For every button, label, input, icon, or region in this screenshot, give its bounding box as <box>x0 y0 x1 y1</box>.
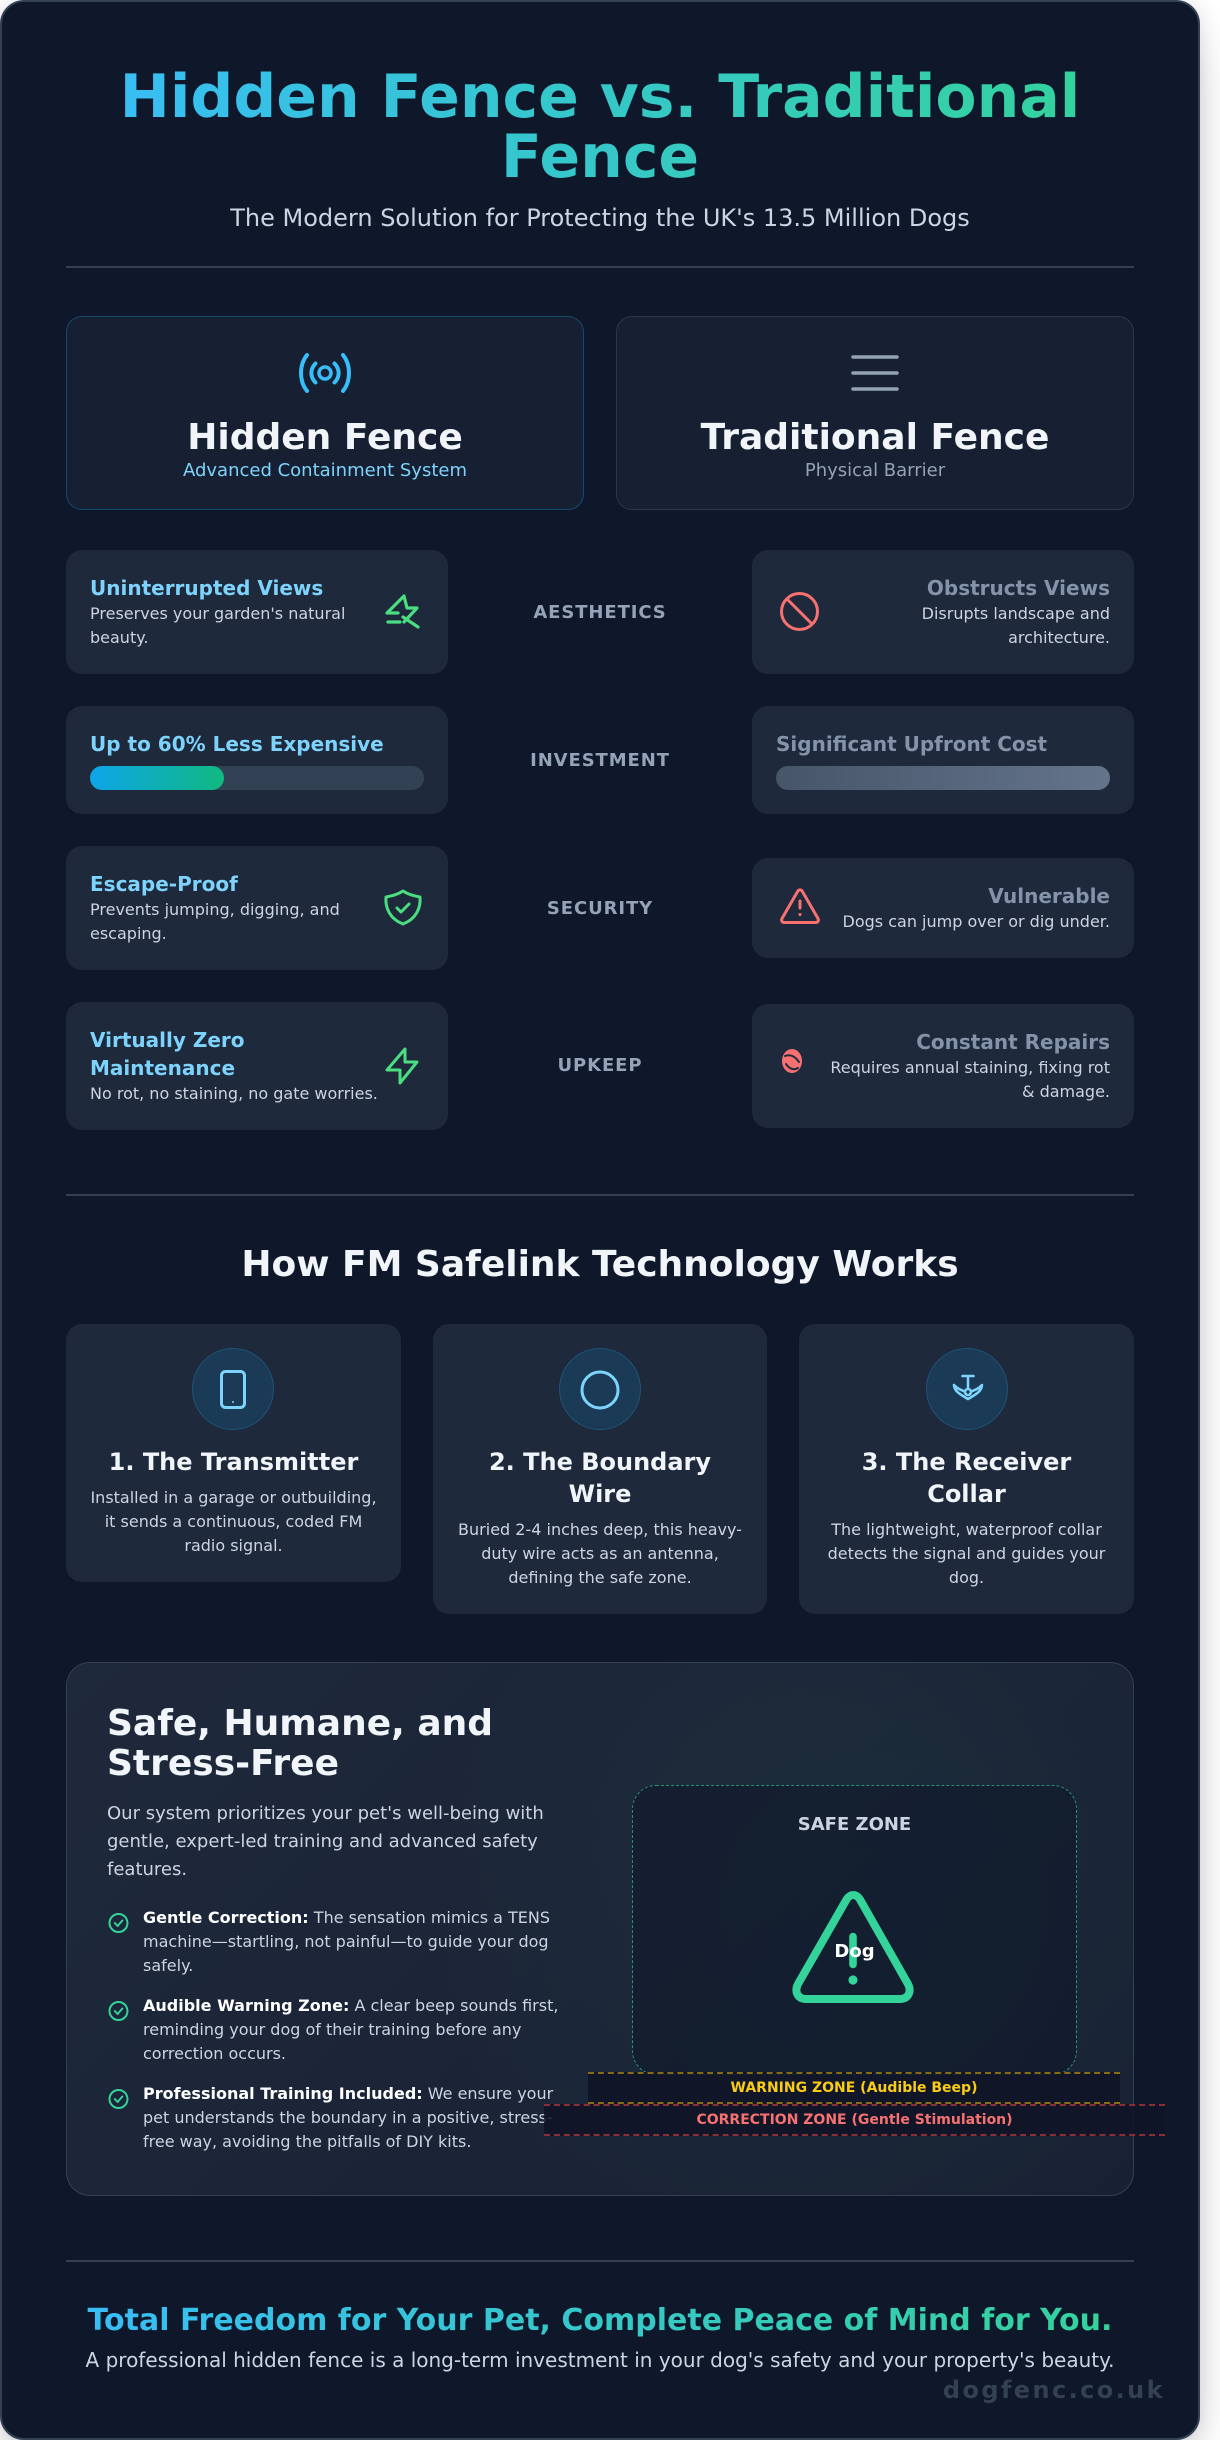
list item: professional training <box>143 2084 554 2151</box>
text: uninterrupted views: Preserves your garden's natural <box>90 604 345 623</box>
heading: step 2: Wire <box>569 1480 631 1508</box>
heading: less expensive: Up to 60% Less Expensive <box>90 732 384 756</box>
bar: 40 percent cost <box>90 766 424 790</box>
list item: audible warning: correction occurs. <box>143 2044 286 2063</box>
icon: fence lines <box>851 355 899 391</box>
label: security: SECURITY <box>547 898 653 919</box>
comparison: obstructs views <box>752 550 1134 674</box>
text: constant repairs <box>830 1030 1110 1101</box>
intro paragraph: features. <box>107 1859 187 1880</box>
label: upkeep: UPKEEP <box>558 1055 642 1076</box>
heading: step 2: 2. The Boundary <box>489 1448 711 1476</box>
heading: step 2 <box>489 1448 711 1508</box>
comparison: constant repairs <box>752 1004 1134 1128</box>
list item: audible warning: reminding your dog of their training before any <box>143 2020 521 2039</box>
text: constant repairs: & damage. <box>1022 1082 1110 1101</box>
text: constant repairs: Requires annual staining, fixing rot <box>830 1058 1110 1077</box>
heading: hidden fence: Hidden Fence <box>187 417 463 458</box>
comparison: uninterrupted views <box>66 550 448 674</box>
panel: hidden fence header <box>66 316 584 510</box>
description: step 1: Installed in a garage or outbuilding, <box>90 1488 377 1507</box>
icon: warning triangle <box>780 888 820 924</box>
text: constant repairs: Constant Repairs <box>916 1030 1110 1054</box>
heading: step 3: Collar <box>927 1480 1006 1508</box>
label: investment: INVESTMENT <box>530 750 670 771</box>
heading: step 1: 1. The Transmitter <box>109 1448 358 1476</box>
description: step 3: The lightweight, waterproof collar <box>831 1520 1102 1539</box>
title <box>66 67 1134 187</box>
footer text: A professional hidden fence is a long-term investment in your dog's safety and your property's beauty. <box>86 2348 1114 2372</box>
step 1: transmitter <box>66 1324 401 1582</box>
icon: bolt <box>385 1048 419 1084</box>
comparison: vulnerable <box>752 858 1134 958</box>
list item: gentle correction: machine—startling, not painful—to guide your dog <box>143 1932 549 1951</box>
heading: safe humane <box>107 1703 493 1784</box>
subtitle: The Modern Solution for Protecting the UK's 13.5 Million Dogs <box>230 204 970 232</box>
title: Fence <box>501 122 699 192</box>
text: escape proof: Prevents jumping, digging, and <box>90 900 340 919</box>
description: step 1: it sends a continuous, coded FM <box>105 1512 362 1531</box>
heading: step 3 <box>862 1448 1072 1508</box>
description: step 2: defining the safe zone. <box>508 1568 692 1587</box>
label: dog: Dog <box>834 1941 875 1962</box>
heading: how it works: How FM Safelink Technology Works <box>241 1244 959 1285</box>
text: vulnerable <box>843 884 1110 931</box>
text: uninterrupted views <box>90 576 345 647</box>
title: Hidden Fence vs. Traditional <box>120 62 1080 132</box>
intro paragraph <box>107 1803 544 1880</box>
watermark: dogfenc.co.uk <box>943 2376 1165 2404</box>
description: step 2: Buried 2-4 inches deep, this heavy- <box>458 1520 742 1539</box>
panel: traditional fence header <box>616 316 1134 510</box>
list item: gentle correction: Gentle Correction: The sensation mimics a TENS <box>143 1908 550 1927</box>
comparison: zero maintenance <box>66 1002 448 1130</box>
footer headline: Total Freedom for Your Pet, Complete Peace of Mind for You. <box>88 2303 1112 2338</box>
heading: traditional fence: Traditional Fence <box>701 417 1049 458</box>
description: step 1: radio signal. <box>184 1536 283 1555</box>
text: uninterrupted views: Uninterrupted Views <box>90 576 323 600</box>
icon: warning triangle large <box>792 1891 914 2003</box>
icon: receiver collar <box>926 1348 1008 1430</box>
text: obstructs views: Disrupts landscape and <box>922 604 1110 623</box>
text: uninterrupted views: beauty. <box>90 628 148 647</box>
list item: audible warning <box>143 1996 558 2063</box>
description: step 3 <box>828 1520 1106 1587</box>
icon: ban <box>780 592 819 631</box>
step 2: boundary wire <box>433 1324 767 1614</box>
text: zero maintenance: Maintenance <box>90 1056 235 1080</box>
intro paragraph: gentle, expert-led training and advanced safety <box>107 1831 538 1852</box>
label: safe zone: SAFE ZONE <box>798 1814 911 1835</box>
intro paragraph: Our system prioritizes your pet's well-being with <box>107 1803 544 1824</box>
comparison: less expensive <box>66 706 448 814</box>
diagram: correction zone <box>544 2104 1165 2136</box>
icon: shield check <box>384 890 422 926</box>
heading: upfront cost: Significant Upfront Cost <box>776 732 1047 756</box>
list item: professional training: pet understands the boundary in a positive, stress- <box>143 2108 553 2127</box>
text: vulnerable: Vulnerable <box>988 884 1110 908</box>
label: aesthetics: AESTHETICS <box>533 602 667 623</box>
list item: professional training: free way, avoiding the pitfalls of DIY kits. <box>143 2132 471 2151</box>
diagram: warning zone: WARNING ZONE (Audible Beep) <box>731 2080 977 2096</box>
text: escape proof: escaping. <box>90 924 167 943</box>
heading: step 3: 3. The Receiver <box>862 1448 1071 1476</box>
heading: safe humane: Stress-Free <box>107 1743 339 1784</box>
text: zero maintenance: Virtually Zero <box>90 1028 245 1052</box>
icon: check 1 <box>108 1913 128 1933</box>
text: obstructs views: architecture. <box>1008 628 1110 647</box>
list item: gentle correction <box>143 1908 550 1975</box>
bar: full cost <box>776 766 1110 790</box>
icon: check 3 <box>108 2089 128 2109</box>
text: escape proof: Escape-Proof <box>90 872 238 896</box>
text: zero maintenance <box>90 1028 378 1103</box>
icon: radio signal <box>299 352 351 394</box>
list item: professional training: Professional Training Included: We ensure your <box>143 2084 553 2103</box>
diagram: safe zone <box>632 1785 1077 2075</box>
description: step 3: dog. <box>949 1568 984 1587</box>
subheading: hidden fence: Advanced Containment System <box>183 460 467 481</box>
text: obstructs views: Obstructs Views <box>927 576 1110 600</box>
description: step 2: duty wire acts as an antenna, <box>481 1544 719 1563</box>
text: zero maintenance: No rot, no staining, no gate worries. <box>90 1084 378 1103</box>
list item: gentle correction: safely. <box>143 1956 193 1975</box>
icon: repairs <box>782 1049 802 1073</box>
description: step 3: detects the signal and guides your <box>828 1544 1105 1563</box>
text: vulnerable: Dogs can jump over or dig under. <box>843 912 1110 931</box>
subheading: traditional fence: Physical Barrier <box>805 460 945 481</box>
icon: boundary loop <box>559 1348 641 1430</box>
diagram: correction zone: CORRECTION ZONE (Gentle Stimulation) <box>696 2112 1013 2128</box>
icon: check 2 <box>108 2001 128 2021</box>
icon: phone transmitter <box>192 1348 274 1430</box>
description: step 2 <box>458 1520 742 1587</box>
panel: safe humane <box>66 1662 1134 2196</box>
comparison: escape proof <box>66 846 448 970</box>
text: escape proof <box>90 872 340 943</box>
heading: safe humane: Safe, Humane, and <box>107 1703 493 1744</box>
description: step 1 <box>90 1488 377 1555</box>
text: obstructs views <box>922 576 1110 647</box>
comparison: upfront cost <box>752 706 1134 814</box>
icon: zap off <box>385 594 420 629</box>
diagram: warning zone <box>588 2072 1120 2104</box>
step 3: receiver collar <box>799 1324 1134 1614</box>
list item: audible warning: Audible Warning Zone: A clear beep sounds first, <box>143 1996 558 2015</box>
